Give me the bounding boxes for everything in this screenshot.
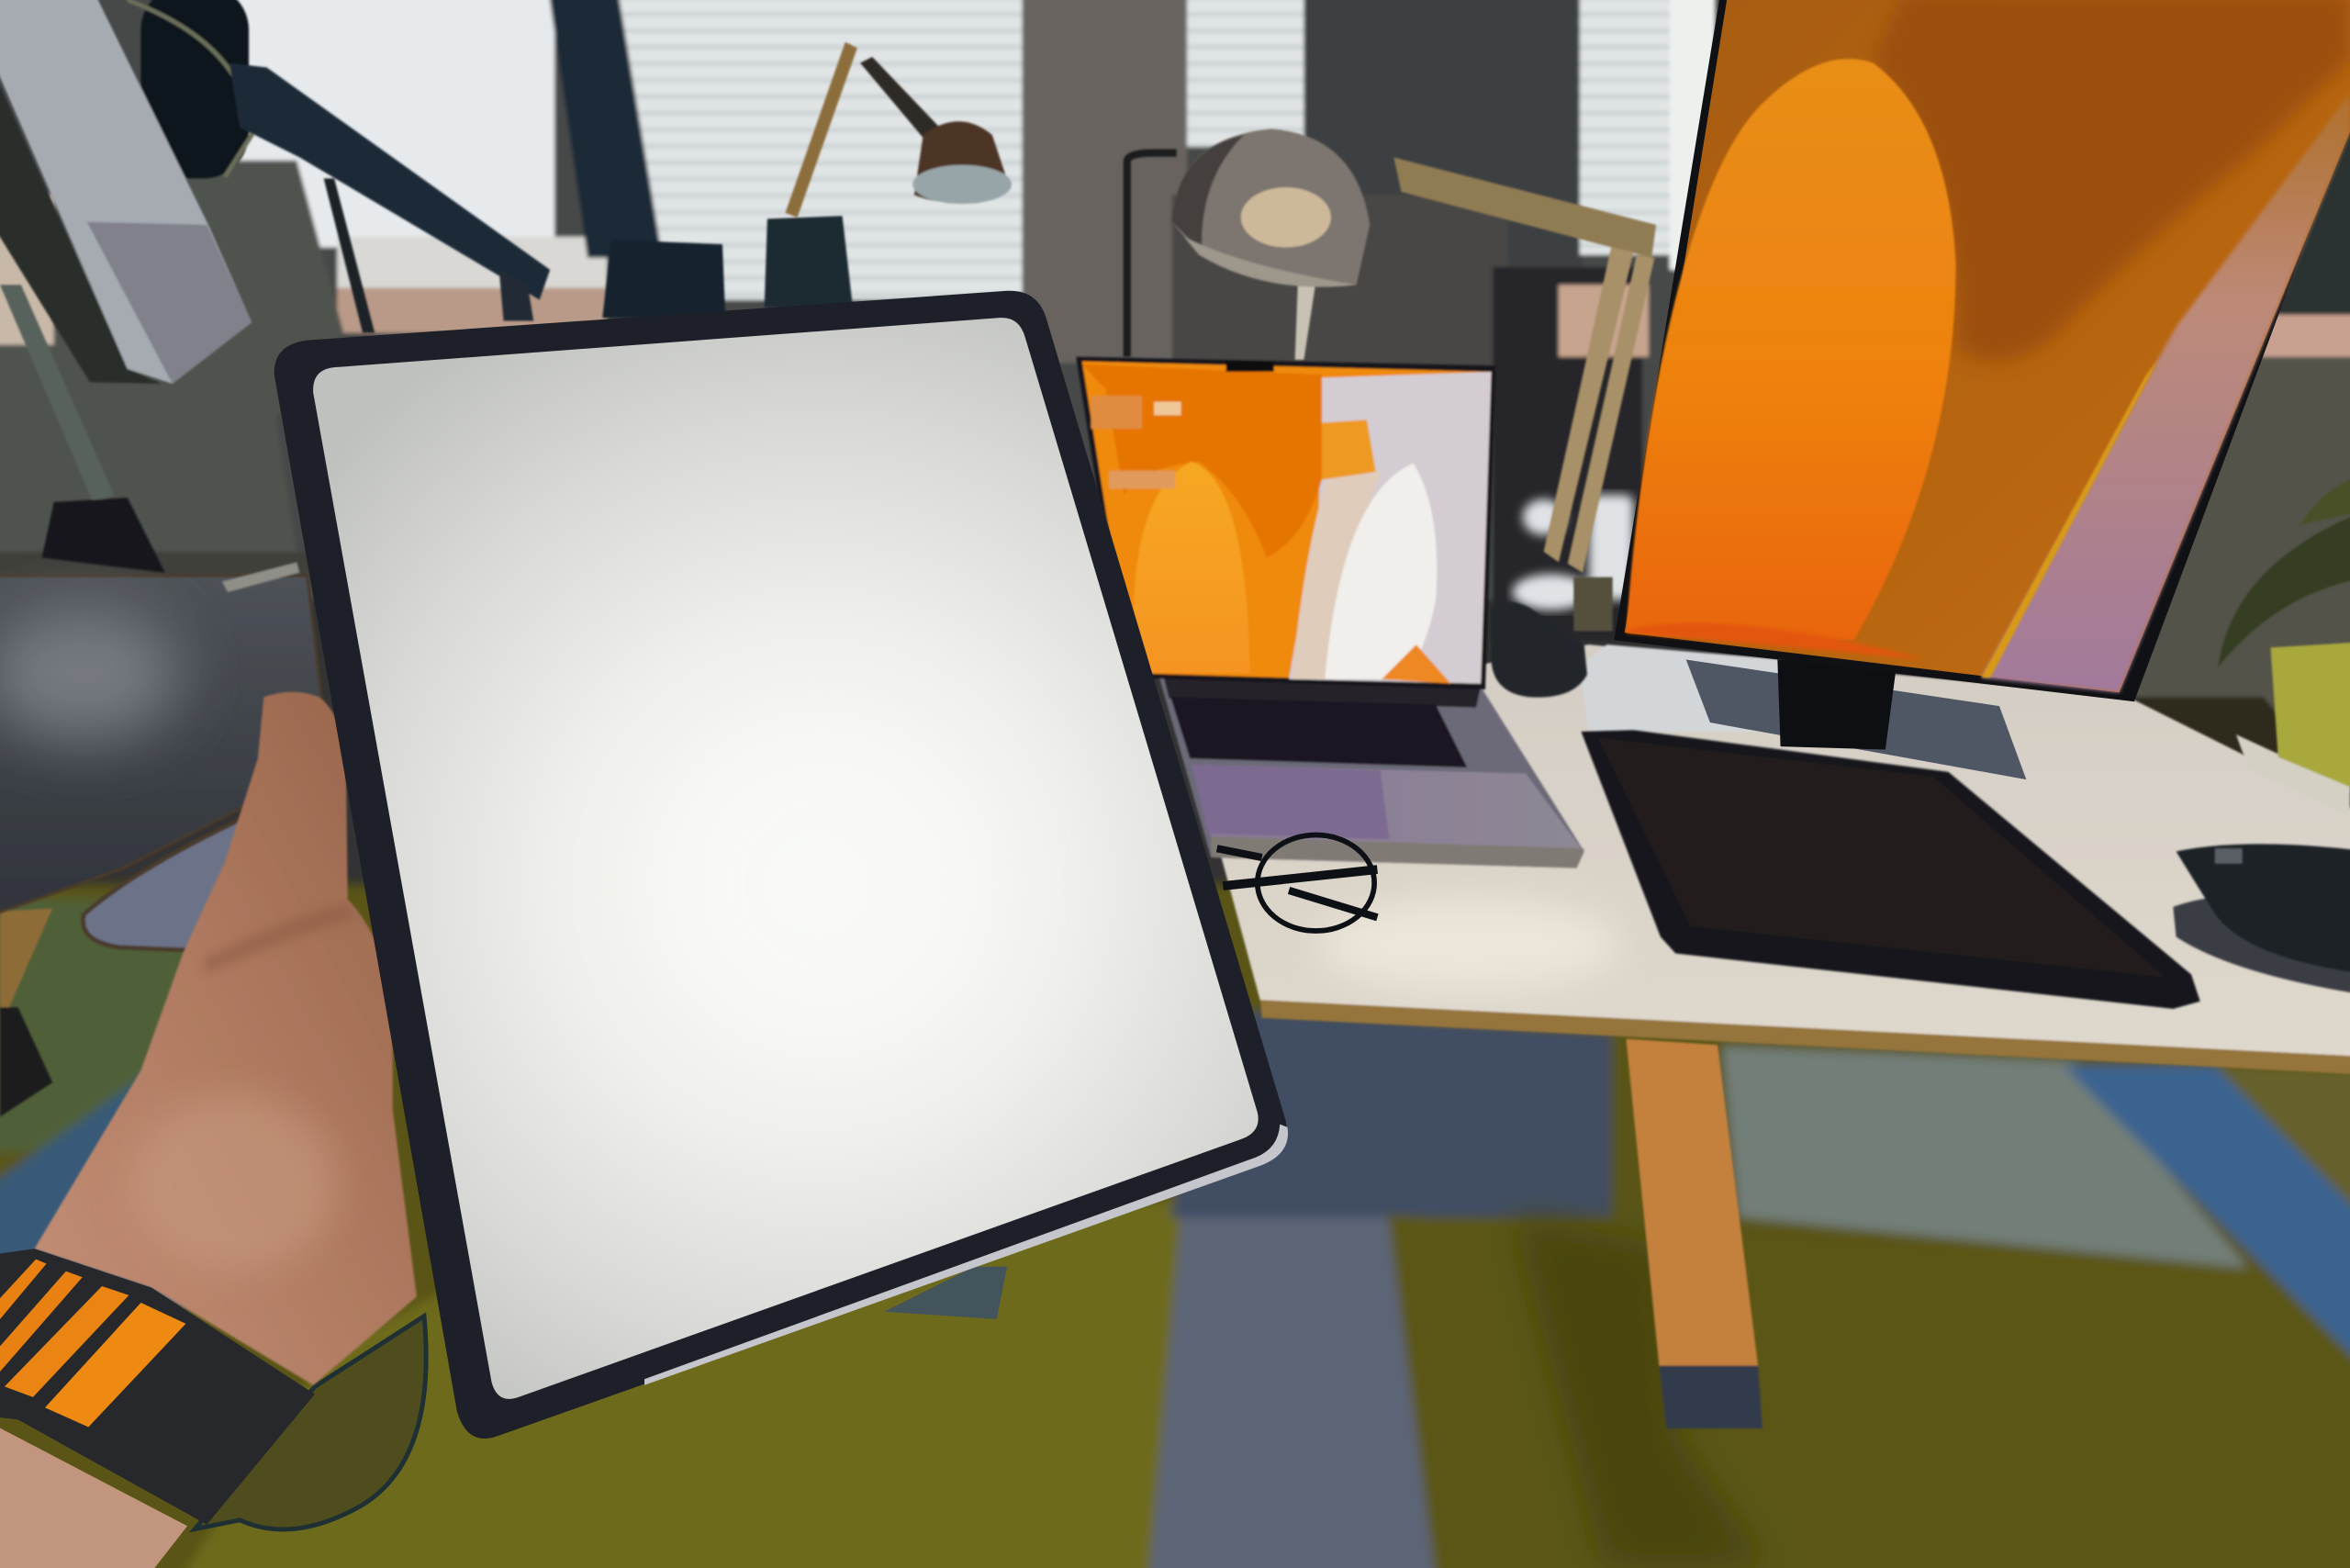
mount ring bbox=[128, 0, 252, 177]
laptop base bbox=[1158, 675, 1584, 868]
laptop wallpaper bbox=[1082, 362, 1491, 684]
desktop clock widget bbox=[1154, 402, 1181, 415]
desk plant bbox=[2218, 472, 2350, 817]
arm post bbox=[499, 270, 533, 320]
blue carpet bbox=[0, 1049, 300, 1305]
hinge bbox=[1163, 675, 1481, 708]
wallpaper yellow arch bbox=[1133, 462, 1250, 673]
peach window patch bbox=[1559, 285, 1649, 357]
paper on desk bbox=[1580, 644, 1784, 732]
olive corner bbox=[2215, 1066, 2350, 1237]
third orange stripe bbox=[0, 1271, 83, 1372]
forearm bbox=[0, 1424, 187, 1568]
palm rest bbox=[1192, 765, 1581, 848]
white objects behind laptop bbox=[1512, 495, 1634, 610]
bottle bbox=[765, 216, 853, 308]
table highlight bbox=[0, 607, 180, 742]
center window bbox=[1187, 0, 1307, 147]
pot bbox=[2270, 642, 2350, 794]
second orange stripe bbox=[5, 1286, 129, 1397]
desk reflection bbox=[1319, 900, 1618, 990]
lamp arm bbox=[786, 42, 857, 218]
tablet body bbox=[274, 291, 1287, 1439]
desktop widgets bbox=[1091, 396, 1142, 429]
right bright window bbox=[1670, 0, 1715, 270]
brass lamp arm bbox=[1393, 157, 1656, 258]
pale pink wedge bbox=[1981, 93, 2350, 692]
center concrete pillar bbox=[1022, 0, 1187, 363]
thumb crease shadow bbox=[202, 902, 357, 974]
stand base bbox=[42, 498, 165, 573]
cable loop under hand bbox=[195, 1316, 426, 1529]
grey-blue carpet upper bbox=[1169, 1012, 1611, 1217]
grey monitor dark edge bbox=[0, 69, 162, 384]
background wall and windows bbox=[0, 0, 2350, 817]
bridge bbox=[1217, 848, 1262, 857]
tray bbox=[2236, 734, 2350, 817]
bright orange oval bbox=[1626, 59, 1956, 640]
grey monitor back bbox=[0, 0, 252, 384]
monitor stand base bbox=[1686, 659, 2026, 779]
carpet floor bbox=[0, 884, 2350, 1568]
monitor wallpaper bbox=[1625, 0, 2350, 692]
frame behind lamp bbox=[1127, 153, 1177, 357]
mouse body bbox=[2177, 844, 2350, 974]
top leaf bbox=[2300, 472, 2350, 525]
trackpad bbox=[1192, 765, 1389, 839]
right peach strip bbox=[2248, 315, 2350, 357]
mouse pad shadow bbox=[2173, 893, 2350, 995]
monitor lower panel bbox=[87, 222, 252, 384]
olive carpet right bbox=[1388, 1215, 2350, 1568]
palm highlight bbox=[128, 1094, 337, 1274]
keyboard bbox=[1170, 697, 1467, 767]
oval lower shadow bbox=[1628, 622, 1926, 659]
left window bbox=[218, 0, 554, 247]
hand holding tablet bbox=[0, 692, 426, 1568]
wallpaper lower triangle bbox=[1382, 644, 1450, 684]
dark window pillar bbox=[545, 0, 663, 258]
dark floor behind desk corner bbox=[2128, 697, 2350, 817]
screen glow bbox=[644, 704, 1004, 1064]
grey carpet lower bbox=[1147, 1211, 1438, 1568]
lamp stem bbox=[1295, 282, 1315, 360]
dark speaker bbox=[1491, 602, 1587, 698]
palm and thumb bbox=[35, 692, 417, 1385]
silver dome lamp bbox=[1127, 129, 1656, 698]
rear temple bbox=[1289, 890, 1377, 917]
tablet foot under far table bbox=[884, 1267, 1007, 1319]
big orange stripe bbox=[45, 1303, 185, 1428]
blinds window bbox=[614, 0, 1028, 300]
desk surface bbox=[1184, 644, 2350, 1428]
fourth orange stripe bbox=[0, 1260, 47, 1319]
wallpaper white oval bbox=[1325, 464, 1437, 679]
wallpaper grey wall bbox=[1289, 372, 1491, 684]
far left window bbox=[0, 195, 54, 345]
lamp dome bbox=[1172, 129, 1370, 286]
monitor stand neck bbox=[1777, 659, 1896, 749]
laptop bbox=[1076, 357, 1584, 868]
dome rim bbox=[1184, 237, 1357, 287]
monitor arm at top left bbox=[0, 0, 550, 573]
laptop front edge bbox=[1211, 836, 1584, 868]
external monitor bbox=[1614, 0, 2350, 779]
far table light streak bbox=[222, 562, 300, 592]
lower table bbox=[84, 817, 246, 950]
leg shadow bbox=[1514, 1217, 1769, 1568]
far desk lamp and bottle bbox=[602, 42, 1012, 318]
watch strap bbox=[0, 1249, 315, 1525]
wallpaper darker orange bbox=[1082, 364, 1322, 557]
dome bright reflection bbox=[1241, 187, 1331, 247]
leaf bbox=[2218, 510, 2350, 667]
desk edge bbox=[1260, 1000, 2350, 1075]
wallpaper beige fold bbox=[1292, 471, 1382, 679]
wallpaper amber wedge bbox=[1322, 420, 1376, 480]
mouse wheel highlight bbox=[2215, 848, 2242, 864]
table leg bbox=[0, 909, 52, 1028]
olive carpet left bbox=[165, 1199, 1184, 1568]
blue carpet right bbox=[2064, 1066, 2350, 1386]
arm bbox=[229, 63, 550, 300]
floor strip bbox=[0, 552, 337, 576]
lamp joint bbox=[860, 57, 938, 138]
dark chair box bbox=[602, 240, 725, 318]
right top dark blinds bbox=[2255, 60, 2350, 322]
right wall bbox=[2128, 315, 2350, 810]
lamp base clamp bbox=[1573, 577, 1613, 631]
shelf behind laptop bbox=[1493, 267, 1642, 642]
VESA mount bbox=[140, 0, 249, 178]
far orange buildings bbox=[337, 288, 607, 333]
dark wall panel bbox=[1304, 0, 1583, 367]
laptop screen frame bbox=[1076, 357, 1495, 689]
mouse bbox=[2173, 844, 2350, 995]
pale carpet bbox=[1722, 1047, 2248, 1268]
acoustic panel behind lamp bbox=[1172, 195, 1507, 372]
mat top surface bbox=[1597, 737, 2165, 978]
right blinds window bbox=[1580, 0, 1673, 255]
yellow crease bbox=[1981, 360, 2158, 678]
lamp head bbox=[914, 121, 1010, 203]
tablet screen bbox=[313, 318, 1259, 1399]
green carpet bbox=[0, 900, 285, 1154]
stand pole bbox=[0, 285, 114, 502]
desk foot bbox=[1659, 1366, 1762, 1428]
left acoustic panel bbox=[0, 161, 343, 552]
lamp shade bbox=[912, 165, 1012, 204]
laptop notch bbox=[1226, 362, 1274, 372]
tablet bbox=[274, 291, 1288, 1439]
arm pole bbox=[324, 178, 375, 333]
far railing view bbox=[337, 237, 607, 291]
desktop icons bbox=[1109, 471, 1175, 488]
dome dark side bbox=[1172, 135, 1244, 252]
main table bbox=[0, 576, 322, 917]
lens rim bbox=[1258, 835, 1374, 931]
eyeglasses bbox=[1217, 835, 1377, 931]
monitor bezel bbox=[1614, 0, 2350, 701]
brass rods bbox=[1544, 247, 1634, 562]
tablet lit edge bbox=[644, 1125, 1288, 1385]
desk leg bbox=[1626, 1039, 1758, 1366]
left side table bbox=[0, 576, 322, 1117]
brown shadow region bbox=[1874, 0, 2350, 361]
black desk mat bbox=[1581, 730, 2200, 1009]
table foot bbox=[0, 1007, 52, 1117]
front temple bbox=[1223, 869, 1377, 886]
